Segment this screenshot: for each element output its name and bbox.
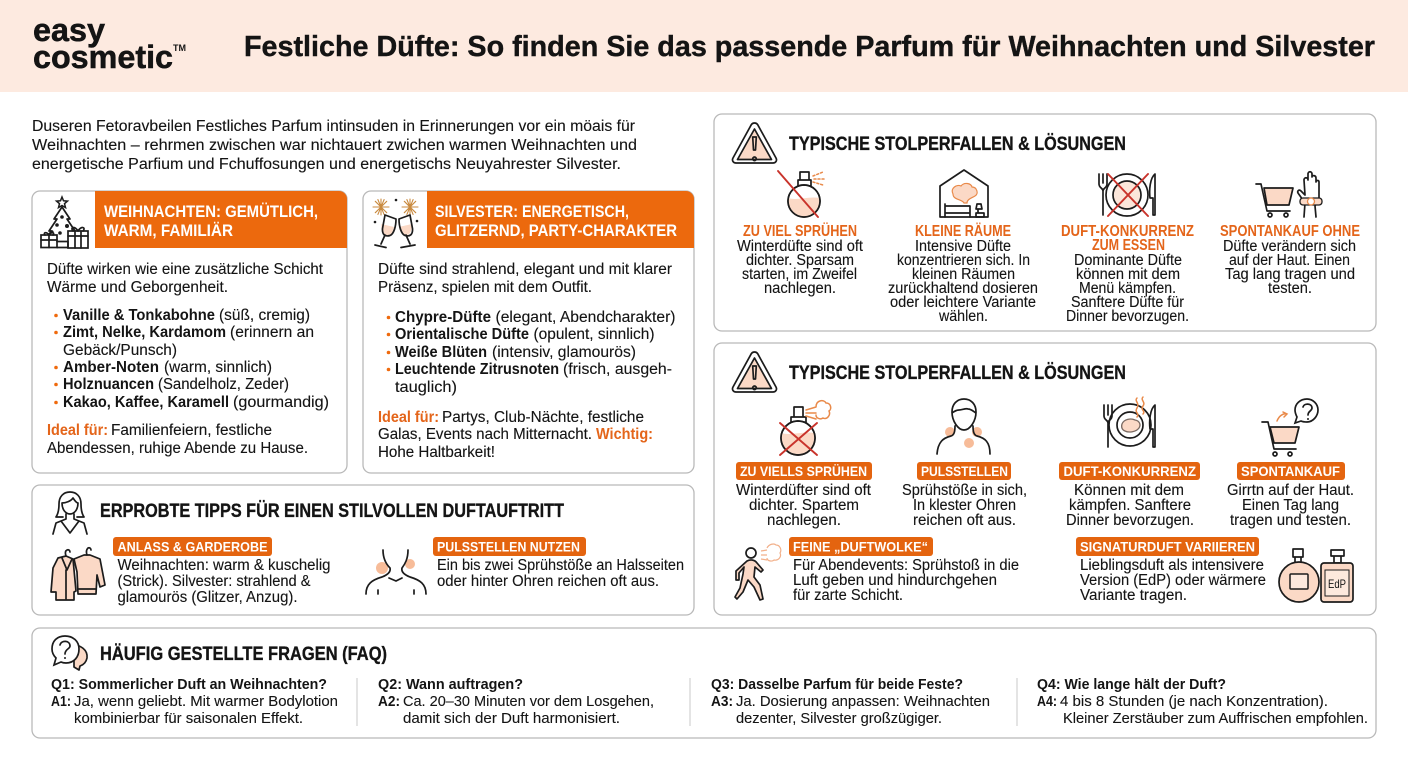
list: Weihnachten notes: Gebäck/Punsch): [63, 342, 177, 359]
tip: Signaturduft variieren: Variante tragen.: [1080, 587, 1187, 604]
text: Silvester ideal for: [378, 409, 653, 461]
text: Silvester ideal for: Galas, Events nach Mitternacht.: [378, 426, 592, 443]
icon: christmas tree with gifts: [41, 197, 88, 248]
tip: Pulsstellen nutzen: PULSSTELLEN NUTZEN: [437, 540, 580, 554]
FAQ 4: A4:: [1037, 694, 1057, 710]
FAQ 1: [51, 677, 338, 727]
panel heading: Weihnachten: WARM, FAMILIÄR: [104, 222, 233, 240]
item: too much spraying: Winterdüfter sind oft: [736, 482, 872, 499]
list: Weihnachten notes: [54, 307, 329, 411]
FAQ 3: [711, 677, 990, 727]
logo: TM: [173, 43, 186, 53]
item: too much spraying: nachlegen.: [767, 512, 841, 529]
tip: Anlass und Garderobe: glamourös (Glitzer, Anzug).: [118, 589, 298, 606]
list: Silvester notes: (intensiv, glamourös): [492, 344, 636, 361]
icon: warning triangle: [733, 123, 776, 163]
item: small rooms: konzentrieren sich. In: [897, 252, 1030, 269]
text: Weihnachten ideal for: Familienfeiern, festliche: [111, 422, 272, 439]
list: Weihnachten notes: Vanille & Tonkabohne: [63, 307, 215, 324]
item: scent competition at dinner: Dinner bevorzugen.: [1066, 308, 1189, 325]
tip: Anlass und Garderobe: [113, 537, 330, 606]
icon: crossed plate: [1099, 174, 1155, 216]
tip: Pulsstellen nutzen: Ein bis zwei Sprühstöße an Halsseiten: [437, 557, 684, 574]
text: Weihnachten ideal for: [47, 422, 308, 457]
tip: Anlass und Garderobe: (Strick). Silvester: strahlend &: [118, 573, 310, 590]
item: spontaneous purchase: tragen und testen.: [1230, 512, 1351, 529]
tip: feine Duftwolke: Für Abendevents: Sprühstoß in die: [793, 557, 1019, 574]
item: small rooms: zurückhaltend dosieren: [888, 280, 1038, 297]
item: spontaneous purchase: Girrtn auf der Haut.: [1227, 482, 1354, 499]
tip: feine Duftwolke: Luft geben und hindurchgehen: [793, 572, 997, 589]
item: too much spraying: dichter. Spartem: [749, 497, 859, 514]
list: Weihnachten notes: (erinnern an: [230, 324, 314, 341]
intro text: Duseren Fetoravbeilen Festliches Parfum intinsuden in Erinnerungen vor ein möais für: [32, 118, 635, 135]
FAQ 1: A1:: [51, 694, 71, 710]
logo: cosmetic: [33, 39, 173, 75]
list: Silvester notes: Chypre-Düfte: [395, 309, 491, 326]
tip: feine Duftwolke: für zarte Schicht.: [793, 587, 903, 604]
FAQ 3: A3:: [711, 694, 733, 710]
item: pulse points: In klester Ohren: [913, 497, 1016, 514]
item: pulse points: [902, 399, 1027, 529]
item: small rooms: wählen.: [938, 308, 988, 325]
intro text: Weihnachten – rehrmen zwischen war nichtauert zwichen warmen Weihnachten und: [32, 137, 637, 154]
tip: Anlass und Garderobe: ANLASS & GARDEROBE: [118, 540, 268, 554]
heading: pitfalls: TYPISCHE STOLPERFALLEN & LÖSUNGEN: [789, 361, 1126, 384]
text: Silvester ideal for: Wichtig:: [596, 426, 653, 443]
icon: two perfume bottles: EdP: [1328, 577, 1346, 591]
tip: Signaturduft variieren: Lieblingsduft als intensivere: [1080, 557, 1264, 574]
list: Silvester notes: (frisch, ausgeh-: [563, 361, 672, 378]
FAQ 2: [378, 677, 654, 727]
item: spontaneous purchase: SPONTANKAUF: [1241, 464, 1340, 479]
FAQ 2: Q2: Wann auftragen?: [378, 677, 523, 693]
text: Silvester ideal for: Ideal für:: [378, 409, 439, 426]
text: Weihnachten description: Wärme und Geborgenheit.: [47, 279, 228, 296]
FAQ 3: Q3: Dasselbe Parfum für beide Feste?: [711, 677, 963, 693]
icon: crossed perfume bottle: [778, 171, 824, 217]
FAQ 4: [1037, 677, 1368, 727]
item: scent competition: DUFT-KONKURRENZ: [1064, 464, 1196, 479]
item: scent competition at dinner: ZUM ESSEN: [1092, 237, 1165, 254]
list: Weihnachten notes: (Sandelholz, Zeder): [158, 376, 289, 393]
panel heading: Silvester: [427, 191, 694, 248]
tips heading: ERPROBTE TIPPS FÜR EINEN STILVOLLEN DUFTAUFTRITT: [100, 499, 564, 522]
item: too much spraying: dichter. Sparsam: [746, 252, 854, 269]
heading: pitfalls: TYPISCHE STOLPERFALLEN & LÖSUNGEN: [789, 132, 1126, 155]
intro text: [32, 118, 637, 173]
item: too much spraying: Winterdüfte sind oft: [737, 238, 864, 255]
panel: pitfalls top: [714, 114, 1376, 331]
list: Weihnachten notes: Holznuancen: [63, 376, 154, 393]
panel heading: Silvester: SILVESTER: ENERGETISCH,: [435, 203, 629, 221]
item: spontaneous purchase: testen.: [1268, 280, 1312, 297]
item: spontaneous purchase: Düfte verändern sich: [1223, 238, 1356, 255]
FAQ 4: Kleiner Zerstäuber zum Auffrischen empfohlen.: [1063, 711, 1368, 727]
panel: Silvester: [363, 191, 694, 473]
list: Weihnachten notes: (gourmandig): [233, 394, 329, 411]
panel: tips: [32, 485, 694, 615]
FAQ 1: Q1: Sommerlicher Duft an Weihnachten?: [51, 677, 327, 693]
item: pulse points: Sprühstöße in sich,: [902, 482, 1027, 499]
list: Silvester notes: [387, 309, 676, 396]
item: small rooms: [888, 170, 1038, 325]
list: Silvester notes: tauglich): [395, 379, 457, 396]
list: Weihnachten notes: (süß, cremig): [219, 307, 310, 324]
icon: person with pulse points: [937, 399, 990, 454]
item: spontaneous purchase: auf der Haut. Einen: [1229, 252, 1350, 269]
panel heading: Silvester: GLITZERND, PARTY-CHARAKTER: [435, 222, 677, 240]
item: scent competition at dinner: Sanftere Düfte für: [1071, 294, 1184, 311]
FAQ 3: Ja. Dosierung anpassen: Weihnachten: [736, 694, 990, 710]
panel: FAQ: [32, 628, 1376, 738]
item: too much spraying: starten, im Zweifel: [742, 266, 857, 283]
icon: woman: [53, 492, 87, 534]
tip: Anlass und Garderobe: Weihnachten: warm & kuschelig: [118, 557, 330, 574]
item: scent competition at dinner: [1061, 174, 1194, 325]
text: Weihnachten ideal for: Abendessen, ruhige Abende zu Hause.: [47, 440, 308, 457]
icon: neck pulse points: [366, 550, 426, 594]
item: spontaneous purchase: [1220, 172, 1360, 297]
list: Weihnachten notes: (warm, sinnlich): [164, 359, 272, 376]
FAQ 2: damit sich der Duft harmonisiert.: [403, 711, 620, 727]
icon: cart with question bubble: [1262, 399, 1318, 456]
icon: clothes on hangers: [51, 548, 105, 600]
icon: crossed perfume spray: [780, 401, 831, 455]
FAQ 1: Ja, wenn geliebt. Mit warmer Bodylotion: [74, 694, 338, 710]
icon: walking person through scent cloud: [735, 544, 781, 600]
item: scent competition: Können mit dem: [1074, 482, 1184, 499]
tip: Signaturduft variieren: [1076, 537, 1266, 604]
item: pulse points: PULSSTELLEN: [921, 464, 1008, 479]
FAQ 4: 4 bis 8 Stunden (je nach Konzentration).: [1060, 694, 1328, 710]
header band: [0, 0, 1408, 92]
icon: champagne glasses and fireworks: [373, 199, 418, 248]
intro text: energetische Parfium und Fchuffosungen und energetischs Neuyahrester Silvester.: [32, 156, 621, 173]
item: small rooms: kleinen Räumen: [912, 266, 1015, 283]
item: spontaneous purchase: Einen Tag lang: [1242, 497, 1339, 514]
item: small rooms: oder leichtere Variante: [890, 294, 1036, 311]
item: scent competition: Dinner bevorzugen.: [1066, 512, 1194, 529]
text: Silvester description: Präsenz, spielen mit dem Outfit.: [378, 279, 592, 296]
FAQ 2: Ca. 20–30 Minuten vor dem Losgehen,: [403, 694, 654, 710]
item: too much spraying: nachlegen.: [764, 280, 836, 297]
tip: Signaturduft variieren: Version (EdP) oder wärmere: [1080, 572, 1266, 589]
tip: feine Duftwolke: FEINE „DUFTWOLKE“: [793, 540, 928, 554]
text: Weihnachten ideal for: Ideal für:: [47, 422, 108, 439]
FAQ 2: A2:: [378, 694, 400, 710]
item: too much spraying: ZU VIEL SPRÜHEN: [743, 223, 857, 240]
item: pulse points: reichen oft aus.: [913, 512, 1016, 529]
item: too much spraying: [737, 171, 864, 297]
tip: Pulsstellen nutzen: [433, 537, 684, 590]
FAQ 1: kombinierbar für saisonalen Effekt.: [74, 711, 303, 727]
list: Silvester notes: (opulent, sinnlich): [534, 326, 654, 343]
list: Silvester notes: Weiße Blüten: [395, 344, 487, 361]
icon: plate with food and steam: [1104, 397, 1155, 447]
item: scent competition at dinner: Dominante Düfte: [1074, 252, 1182, 269]
item: small rooms: Intensive Düfte: [915, 238, 1011, 255]
tip: Pulsstellen nutzen: oder hinter Ohren reichen oft aus.: [437, 573, 659, 590]
list: Silvester notes: Orientalische Düfte: [395, 326, 529, 343]
tip: feine Duftwolke: [789, 537, 1019, 604]
item: spontaneous purchase: [1227, 399, 1354, 529]
panel: Weihnachten: [32, 191, 347, 473]
text: Weihnachten description: Düfte wirken wie eine zusätzliche Schicht: [47, 261, 324, 278]
icon: two perfume bottles: [1279, 549, 1353, 602]
item: too much spraying: [736, 401, 872, 529]
FAQ 4: Q4: Wie lange hält der Duft?: [1037, 677, 1226, 693]
text: Silvester description: Düfte sind strahlend, elegant und mit klarer: [378, 261, 672, 278]
tip: Signaturduft variieren: SIGNATURDUFT VARIIEREN: [1080, 540, 1255, 554]
text: Weihnachten description: [47, 261, 324, 296]
list: Weihnachten notes: Amber-Noten: [63, 359, 159, 376]
panel heading: Weihnachten: [95, 191, 347, 248]
item: scent competition: [1059, 397, 1200, 529]
title: Festliche Düfte: So finden Sie das passende Parfum für Weihnachten und Silvester: [244, 31, 1375, 63]
list: Silvester notes: Leuchtende Zitrusnoten: [395, 361, 559, 378]
logo: [33, 12, 186, 75]
FAQ 3: dezenter, Silvester großzügiger.: [736, 711, 942, 727]
list: Silvester notes: (elegant, Abendcharakter): [496, 309, 676, 326]
item: spontaneous purchase: Tag lang tragen und: [1225, 266, 1355, 283]
item: small rooms: KLEINE RÄUME: [915, 223, 1011, 240]
icon: question speech bubbles: [52, 636, 87, 670]
item: scent competition at dinner: Menü kämpfen.: [1079, 280, 1176, 297]
heading: FAQ: HÄUFIG GESTELLTE FRAGEN (FAQ): [100, 642, 387, 665]
item: scent competition: kämpfen. Sanftere: [1069, 497, 1191, 514]
icon: house with scent cloud: [940, 170, 988, 217]
item: scent competition at dinner: können mit dem: [1076, 266, 1180, 283]
icon: cart and hand: [1256, 172, 1319, 217]
panel: pitfalls bottom: [714, 343, 1376, 615]
text: Silvester description: [378, 261, 672, 296]
icon: warning triangle: [733, 352, 776, 392]
icon detail: wrist watch: [1300, 198, 1322, 205]
list: Weihnachten notes: Zimt, Nelke, Kardamom: [63, 324, 226, 341]
item: spontaneous purchase: SPONTANKAUF OHNE: [1220, 223, 1360, 240]
text: Silvester ideal for: Hohe Haltbarkeit!: [378, 444, 495, 461]
panel heading: Weihnachten: WEIHNACHTEN: GEMÜTLICH,: [104, 202, 318, 221]
logo: easy: [33, 12, 105, 48]
item: scent competition at dinner: DUFT-KONKURRENZ: [1061, 223, 1194, 240]
list: Weihnachten notes: Kakao, Kaffee, Karamell: [63, 394, 229, 411]
item: too much spraying: ZU VIELLS SPRÜHEN: [740, 464, 867, 479]
text: Silvester ideal for: Partys, Club-Nächte, festliche: [442, 409, 644, 426]
